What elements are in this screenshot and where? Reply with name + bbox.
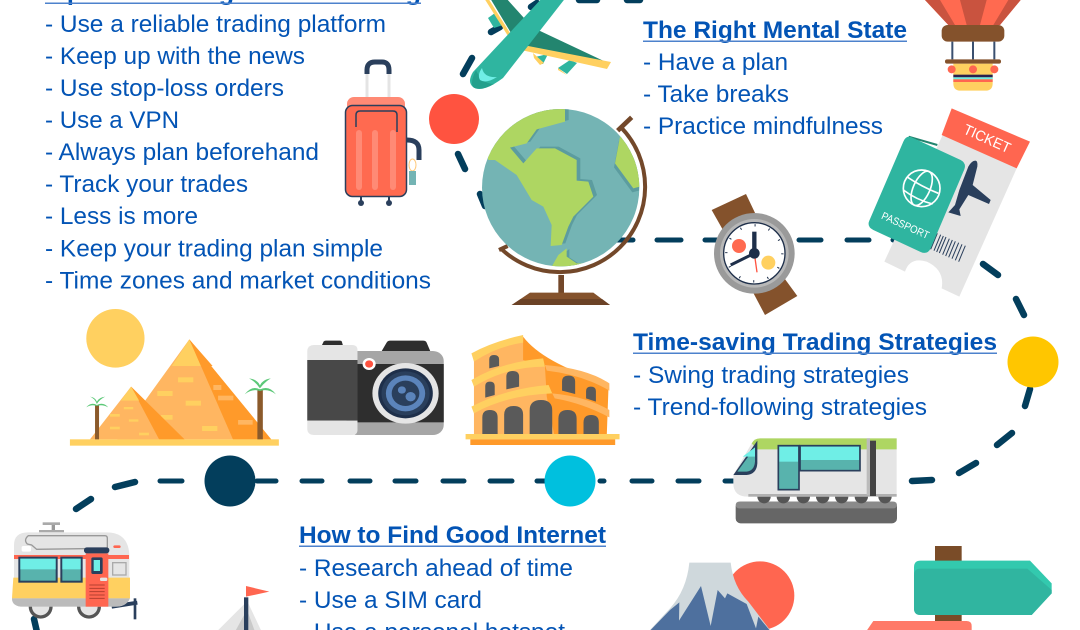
heading: The Right Mental State [643,17,907,44]
tips list: - Time zones and market conditions [45,268,431,294]
icon: passport and ticket [869,108,1030,297]
icon: mount fuji and sun [650,561,794,630]
panel: tips for trading while traveling [45,0,431,294]
internet list [299,555,573,630]
icon: train [733,438,897,523]
icon: camera [307,341,444,435]
passport label: PASSPORT [879,210,931,242]
ticket label: TICKET [961,122,1013,157]
route marker: red dot [429,94,479,144]
route marker: navy dot [204,456,256,506]
icon: camper van [12,522,137,619]
icon: airplane [470,0,611,89]
panel: the right mental state [643,17,907,140]
strategies list: - Swing trading strategies [633,362,909,389]
mental state list [643,49,883,140]
panel: time-saving trading strategies [633,329,997,421]
tips list: - Always plan beforehand [45,139,319,166]
icon: suitcase [346,62,419,206]
icon: pyramids and sun [70,309,279,446]
icon: globe [477,98,645,305]
route marker: yellow dot [1008,336,1058,388]
mental state list: - Have a plan [643,49,788,76]
icon: colosseum [466,335,620,445]
tips list: - Less is more [45,203,198,230]
heading: Time-saving Trading Strategies [633,329,997,356]
tips list: - Keep up with the news [45,43,305,70]
strategies list: - Trend-following strategies [633,394,927,421]
icon: sailboat [217,586,269,630]
route marker: cyan dot [544,456,596,506]
tips list: - Use a VPN [45,107,179,134]
internet list: - Research ahead of time [299,555,573,582]
tips list: - Keep your trading plan simple [45,236,383,262]
tips list [45,11,431,294]
tips list: - Use a reliable trading platform [45,11,386,38]
panel: how to find good internet [299,522,606,630]
icon: signpost [867,546,1052,630]
internet list: - Use a SIM card [299,587,482,614]
mental state list: - Practice mindfulness [643,113,883,140]
heading: How to Find Good Internet [299,522,606,549]
tips list: - Track your trades [45,171,248,198]
tips list: - Use stop-loss orders [45,75,284,102]
icon: wristwatch [712,194,797,315]
icon: hot air balloon [925,0,1021,91]
mental state list: - Take breaks [643,81,789,108]
strategies list [633,362,927,421]
